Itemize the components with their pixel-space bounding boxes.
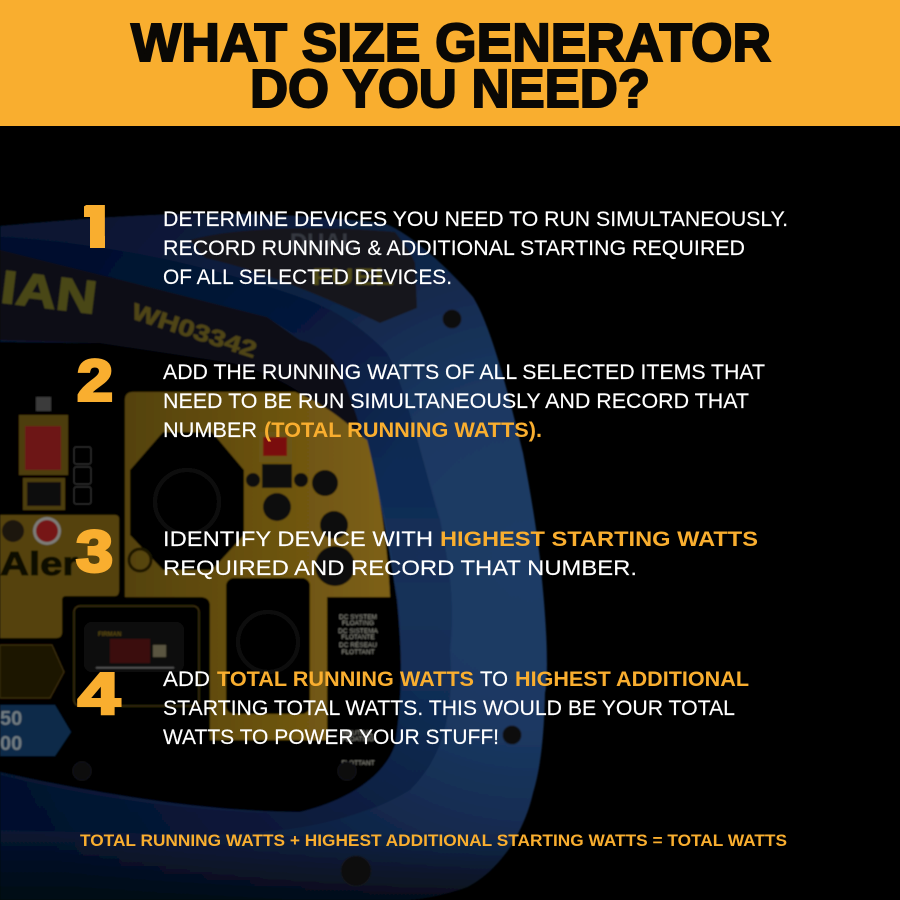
dark label band <box>0 250 363 440</box>
step 2 text: (TOTAL RUNNING WATTS). <box>264 419 542 442</box>
step 1 text: RECORD RUNNING & ADDITIONAL STARTING REQUIRED <box>163 237 745 260</box>
generator photo background <box>0 200 560 900</box>
fuel hexagon labels <box>0 645 71 756</box>
title: DO YOU NEED? <box>250 59 650 119</box>
fuel hexagon labels: 00 <box>0 733 22 755</box>
DC terminal panel: DC RÉSEAU <box>339 640 377 649</box>
title <box>131 13 771 119</box>
step 1 <box>84 205 786 284</box>
step 1 text: DETERMINE DEVICES YOU NEED TO RUN SIMULTANEOUSLY. <box>163 208 788 231</box>
step 4 text: WATTS TO POWER YOUR STUFF! <box>163 726 499 749</box>
yellow panel <box>125 392 390 740</box>
alert label panel: Aler <box>0 545 78 582</box>
generator blue housing <box>0 200 560 900</box>
step 3 number: 3 <box>76 520 113 584</box>
small controls <box>129 432 355 586</box>
DC terminal panel: FLOTTANT <box>341 649 375 656</box>
step 2 text <box>163 361 765 442</box>
DC terminal panel: DC SISTEMA <box>338 628 379 635</box>
step 3 text: HIGHEST STARTING WATTS <box>440 528 758 551</box>
step 4 text: TO <box>480 668 508 691</box>
step 4 text: TOTAL RUNNING WATTS <box>217 668 474 691</box>
DC terminal panel: FLOTANTE <box>341 634 375 641</box>
square outlet <box>226 578 310 714</box>
dual fuel badge <box>190 228 417 323</box>
step 1 number: 1 <box>78 194 112 259</box>
navy inner stripe <box>0 237 452 835</box>
dual fuel badge: DUAL <box>290 229 356 256</box>
step 2 text: NEED TO BE RUN SIMULTANEOUSLY AND RECORD THAT <box>163 390 749 413</box>
step 1 text <box>163 208 788 289</box>
step 1 text: OF ALL SELECTED DEVICES. <box>163 266 452 289</box>
step 4 text: ADD <box>163 668 210 691</box>
octagon outlet <box>130 432 244 570</box>
step 2 number: 2 <box>77 348 113 414</box>
dual fuel badge: FUEL <box>312 264 394 291</box>
alert label panel <box>0 515 119 638</box>
step 3 text: REQUIRED AND RECORD THAT NUMBER. <box>163 557 637 580</box>
step 4 text <box>163 668 749 749</box>
DC terminal panel <box>327 598 389 767</box>
octagon socket ring <box>155 470 219 534</box>
model number: WH03342 <box>128 298 260 363</box>
DC terminal panel: DC SYSTEM <box>339 614 377 621</box>
title: WHAT SIZE GENERATOR <box>131 13 771 73</box>
power switch <box>19 397 91 510</box>
DC terminal panel: FLOATING <box>342 736 374 743</box>
screws <box>73 310 521 886</box>
step 2 text: ADD THE RUNNING WATTS OF ALL SELECTED ITEMS THAT <box>163 361 765 384</box>
step 4 number: 4 <box>78 662 120 726</box>
step 3 text: IDENTIFY DEVICE WITH <box>163 528 433 551</box>
DC terminal panel: FLOATING <box>342 620 374 627</box>
digital meter <box>74 606 199 706</box>
formula footer: TOTAL RUNNING WATTS + HIGHEST ADDITIONAL STARTING WATTS = TOTAL WATTS <box>80 831 787 850</box>
step 4 text: HIGHEST ADDITIONAL <box>515 668 749 691</box>
black control panel <box>0 342 401 812</box>
step 4 <box>78 662 749 749</box>
DC terminal panel: FLOTTANT <box>341 760 375 767</box>
step 3 text <box>163 528 758 580</box>
digital meter: FIRMAN <box>98 632 121 638</box>
square socket ring <box>238 612 298 672</box>
header banner <box>0 0 900 126</box>
fuel hexagon labels: 50 <box>0 708 22 730</box>
brand name: IAN <box>0 260 100 324</box>
step 2 <box>77 348 765 442</box>
step 4 text: STARTING TOTAL WATTS. THIS WOULD BE YOUR TOTAL <box>163 697 735 720</box>
step 3 <box>76 520 758 584</box>
DC terminal panel: NEUTRAL <box>343 730 374 737</box>
step 2 text: NUMBER <box>163 419 257 442</box>
